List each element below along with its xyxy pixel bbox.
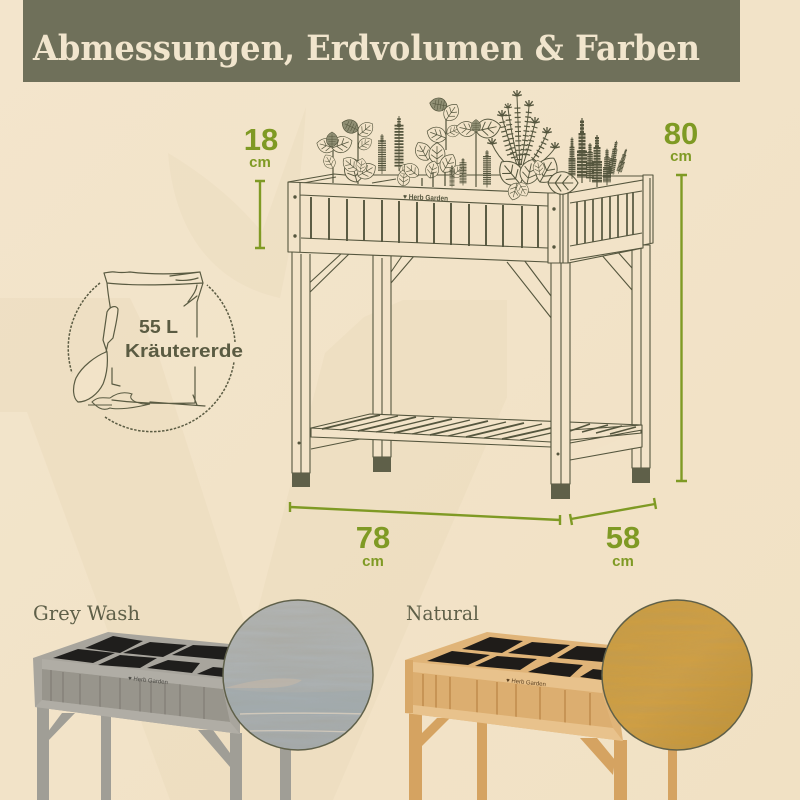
- dimension: 18 cm: [244, 122, 278, 248]
- label 55 L: 55 L: [139, 316, 178, 337]
- shelf: [311, 414, 642, 460]
- rosemary: [382, 116, 413, 187]
- logo: Herb Garden: ♥ Herb Garden: [403, 192, 449, 203]
- dimension: 78 cm: 78: [356, 520, 390, 555]
- soil bag illustration with 55 L label: [68, 272, 243, 432]
- natural legs: [409, 713, 677, 800]
- basil: [315, 132, 355, 183]
- dimension: 58 cm: [570, 498, 656, 570]
- herbs: [315, 90, 626, 202]
- front panel: [288, 182, 568, 263]
- icon: bag: [104, 272, 205, 406]
- natural cells: [427, 637, 607, 680]
- dimension: 78 cm: cm: [362, 553, 384, 570]
- dimension: 80 cm: cm: [670, 148, 692, 165]
- dimension: 78 cm: [290, 502, 560, 570]
- grey cells: [53, 636, 230, 677]
- swatch: grey wash wood: [223, 600, 373, 750]
- dimension: 18 cm: cm: [249, 154, 271, 171]
- braces: [305, 250, 632, 319]
- swatch: natural wood: [602, 600, 752, 750]
- right side box: [568, 175, 653, 263]
- central herb: [425, 96, 463, 150]
- lettuce cluster: [400, 139, 467, 187]
- basil 2: [452, 117, 502, 188]
- line drawing: raised planter: [288, 174, 653, 499]
- natural logo: ♥ Herb Garden: [506, 678, 546, 688]
- label Kräutererde: Kräutererde: [125, 340, 243, 361]
- thyme: [487, 90, 560, 172]
- grey logo: ♥ Herb Garden: [128, 676, 168, 686]
- product photo: natural planter: [405, 632, 677, 800]
- rim: [288, 174, 653, 184]
- dimension: 18 cm: 18: [244, 122, 278, 157]
- title band: [23, 0, 740, 82]
- sage leaves: [493, 153, 578, 202]
- front legs: [292, 252, 570, 499]
- dashed circle: [68, 283, 235, 432]
- grey legs: [37, 707, 291, 800]
- icon: soil pile: [88, 393, 150, 409]
- dimension: 80 cm: [664, 116, 698, 481]
- mint: [339, 117, 379, 184]
- rear legs: [373, 245, 650, 483]
- product photo: grey wash planter: [33, 632, 291, 800]
- icon: trowel: [74, 307, 118, 402]
- grey box: [33, 632, 240, 734]
- natural box: [405, 632, 623, 741]
- dimension: 80 cm: 80: [664, 116, 698, 151]
- dimension: 58 cm: cm: [612, 553, 634, 570]
- heading: Grey Wash: Grey Wash: [33, 601, 140, 625]
- title: Abmessungen, Erdvolumen & Farben: [32, 28, 700, 69]
- lavender spikes: [572, 118, 626, 187]
- dimension: 58 cm: 58: [606, 520, 640, 555]
- heading: Natural: Natural: [406, 601, 479, 625]
